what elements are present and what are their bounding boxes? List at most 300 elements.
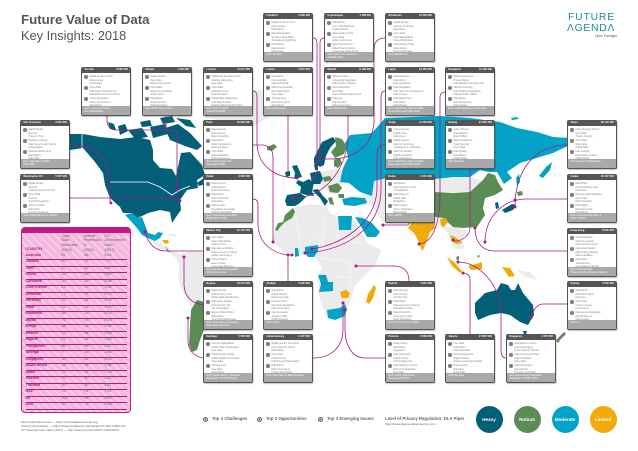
rows: 76 <box>62 376 66 380</box>
footer: a Welfare Role <box>327 56 343 59</box>
insights: Ease of Data <box>212 262 225 265</box>
rows: 81 <box>84 356 88 360</box>
footer: Smart Governance <box>206 271 226 274</box>
header: 2 415 000 <box>420 175 432 178</box>
insights: Data Ownership <box>394 353 411 356</box>
panel: Johannesburg <box>263 334 312 383</box>
header: Hong Kong <box>570 229 584 232</box>
insights: Data Standards <box>394 82 410 85</box>
insights: Data Privacy & Ethics <box>332 47 355 50</box>
connector: Stockholm <box>323 38 385 160</box>
insights: Open Data <box>454 146 465 149</box>
insights: Data Interoperability <box>150 90 172 93</box>
header: Bangalore <box>448 68 461 71</box>
insights <box>206 289 239 321</box>
insights: Data Literacy <box>332 101 347 104</box>
insights: Provision of AI Data <box>514 371 536 374</box>
insights: Transparency <box>212 364 226 367</box>
insights: Data Sharing Consent <box>394 364 417 367</box>
insights: Data Value <box>576 143 587 146</box>
connector: Madrid <box>292 116 348 199</box>
insights: Data Literacy <box>576 318 590 321</box>
panel: Sydney <box>567 281 616 330</box>
panel: Beijing <box>445 120 494 169</box>
rows: 81 <box>62 252 66 256</box>
insights: Ethical Value of <box>576 315 592 318</box>
footer: Next: Big Data <box>448 374 464 377</box>
footer: Data Ownership Trust <box>206 324 230 327</box>
insights: Open Data <box>28 193 40 196</box>
rows: 91 <box>84 389 88 393</box>
insights: Data Liability <box>394 211 407 214</box>
rows: Sweden <box>26 376 39 380</box>
footer <box>446 159 494 168</box>
rows: Singapore <box>26 356 43 360</box>
insights: Data Flow Regulation <box>272 304 294 307</box>
footer: Next: Society 5.0 Regulation <box>570 160 601 163</box>
rows: 73 <box>62 370 66 374</box>
header: Lagos <box>388 68 396 71</box>
insights: Data Ethics <box>272 289 284 292</box>
header: 5 207 000 <box>55 175 67 178</box>
header: 1 308 000 <box>359 14 371 17</box>
subtitle: Key Insights: 2018 <box>21 28 126 42</box>
insights: Identity Trust <box>394 296 407 299</box>
insights: Personal Data <box>272 79 287 82</box>
header: Abidjan <box>266 282 276 285</box>
legend: level of privacy regulation: Level of Privacy Regulation: DLA Piper <box>385 416 464 421</box>
rows: Senegal <box>26 350 39 354</box>
insights: Mass Data Market <box>212 240 231 243</box>
insights: Open Data <box>576 300 587 303</box>
insights: Data Literacy <box>272 47 286 50</box>
rows: Germany <box>26 298 41 302</box>
insights: Data Use <box>332 97 342 100</box>
header: 6 199 000 <box>359 68 371 71</box>
insights: Digital Identity & Trust <box>90 75 113 78</box>
header <box>264 335 312 340</box>
insights: Open Data <box>272 353 283 356</box>
legend: top 3 opportunities <box>257 416 306 422</box>
insights: Open Data <box>150 86 162 89</box>
insights: Digital Literacy for Access <box>272 342 299 345</box>
header <box>446 121 494 126</box>
insights: Data Rules <box>576 182 587 185</box>
insights: Data Sovereignty <box>212 189 230 192</box>
rows: Philippines <box>26 344 45 348</box>
legend: top 3 opportunities: Top 3 Opportunities <box>266 416 306 421</box>
insights: Digital Identity <box>28 182 44 185</box>
insights: Transparent Algorithms <box>272 39 296 42</box>
insights: Data Ownership <box>272 296 289 299</box>
insights: Data Sovereignty <box>514 364 533 367</box>
insights <box>206 236 238 268</box>
panel: San Francisco <box>20 120 70 169</box>
header: Frankfurt <box>266 14 278 17</box>
footer: Governance and Public Policy <box>388 163 420 166</box>
insights: Data Rights <box>28 154 41 157</box>
rows: South Africa <box>26 363 47 367</box>
insights: New Data <box>212 82 222 85</box>
header <box>204 229 252 234</box>
insights: Digital Finance <box>454 357 469 360</box>
connector: Frankfurt <box>312 38 317 179</box>
rows: 91 <box>84 259 88 263</box>
header <box>386 121 434 126</box>
insights: Data Flows Transparency <box>90 90 117 93</box>
rows: Spain <box>26 370 35 374</box>
header: Jakarta <box>448 335 457 338</box>
insights: Trust and Digital Divide <box>212 318 236 321</box>
header <box>568 282 616 287</box>
insights: New Data <box>332 90 343 93</box>
header <box>325 68 372 73</box>
footer: Next: Data Flow and Value of <box>570 214 601 217</box>
insights: Data Regulation <box>212 154 229 157</box>
panel: Lagos <box>385 67 434 116</box>
insights: Data Sharing <box>454 132 467 135</box>
rows: 82 <box>84 266 88 270</box>
insights <box>266 75 293 107</box>
insights: Decentralised Data Control <box>332 93 361 96</box>
insights: Data Interoperability <box>272 86 293 89</box>
rows: 26 <box>84 337 88 341</box>
insights: Data Identity Regulation <box>576 311 601 314</box>
rows: 5.36 <box>104 278 112 282</box>
insights: Data Ethics <box>150 97 163 100</box>
insights: Cyber Security Threats <box>514 349 539 352</box>
insights: Data Development <box>454 353 473 356</box>
footer <box>21 213 68 222</box>
insights: Data Value <box>150 79 162 82</box>
connector: London <box>253 91 298 179</box>
insights <box>448 128 473 160</box>
rows: 7.79 <box>104 370 112 374</box>
insights: Ethics and Access <box>454 75 473 78</box>
footer: Next: Consumer Privacy <box>84 107 110 110</box>
insights: Data Ethics <box>272 28 284 31</box>
rows: 52 <box>62 278 66 282</box>
insights: Machine Learning <box>28 139 48 142</box>
rows: 8.71 <box>104 292 112 296</box>
rows: 100 <box>62 396 68 400</box>
insights: Analytics Skills <box>272 315 287 318</box>
source notes <box>21 420 126 432</box>
header: 11 440 000 <box>479 68 492 71</box>
footer: Next: Identity Rights and <box>388 374 414 377</box>
table header band <box>22 228 130 233</box>
connector: Washington <box>70 198 181 202</box>
rows: Nigeria <box>26 337 38 341</box>
header: Washington DC <box>23 175 43 178</box>
connector: Singapore <box>457 261 506 358</box>
insights: Data Ethics <box>212 193 224 196</box>
legend: level of privacy regulation: https://www.dlapiperdataprotection.com <box>385 422 435 426</box>
insights: Data Ethics <box>272 43 284 46</box>
insights: Data Security and Control <box>28 143 56 146</box>
connector: Lisbon <box>287 116 289 172</box>
panel: Copenhagen <box>324 13 374 62</box>
insights <box>206 182 236 214</box>
footer <box>507 373 554 382</box>
header: Lisbon <box>266 68 275 71</box>
footer: NGO / Sectors <box>570 217 586 220</box>
insights: Data Literacy <box>394 293 408 296</box>
header: Abuja <box>388 121 396 124</box>
rows: 26 <box>62 382 66 386</box>
footer: Next: Data Driven Value Creation <box>388 160 424 163</box>
header: Stockholm <box>388 14 402 17</box>
column heading: Internet Penetration: Internet <box>84 234 95 238</box>
insights: Data Ethics <box>272 349 284 352</box>
insights <box>388 75 424 107</box>
insights: Data Ownership <box>332 86 350 89</box>
header <box>507 335 554 340</box>
insights: Data Literacy & Ethics <box>332 82 356 85</box>
map: moderate regulation countries (blue) <box>125 116 570 320</box>
insights <box>23 182 55 214</box>
footer: Next: Data Value / Public <box>23 160 50 163</box>
insights: Digital Asset <box>394 132 407 135</box>
rows: 34 <box>62 363 66 367</box>
insights: Digital Access <box>394 357 408 360</box>
connector: Mexico City <box>144 231 203 251</box>
insights: Digital Identity <box>150 75 166 78</box>
connector: Sydney <box>530 304 567 319</box>
panel: Pretoria <box>385 334 434 383</box>
insights: Mobile Data Infrastructure <box>212 296 239 299</box>
insights: AI Regulation <box>28 146 43 149</box>
header: Sydney <box>570 282 580 285</box>
insights: Data Profiles <box>454 135 467 138</box>
legend circle: heavy <box>476 406 502 432</box>
rows: Thailand <box>26 382 40 386</box>
connector: San Francisco <box>70 145 112 204</box>
panel: Dubai <box>385 174 434 223</box>
insights: Open Data <box>212 86 223 89</box>
insights: Data Governance <box>212 157 230 160</box>
header <box>568 121 616 126</box>
footer <box>386 52 434 61</box>
panel: Dakar <box>203 174 252 223</box>
connector: Dubai <box>382 222 410 226</box>
rows: 5.67 <box>104 382 112 386</box>
column heading: ICT Development Index: Index <box>104 243 113 247</box>
legend: top 3 challenges: Top 3 Challenges <box>212 416 247 421</box>
insights: Social Consumption Rights <box>454 360 482 363</box>
header: Santiago <box>206 335 217 338</box>
rows: 71 <box>62 292 66 296</box>
insights: Digital Skills <box>576 146 588 149</box>
insights: Data Innovation <box>514 357 531 360</box>
legend circle: robust: Robust <box>519 416 535 422</box>
insights: Business Ethics of AI <box>28 150 51 153</box>
connector: Bangalore <box>418 92 445 245</box>
connector: Paris to Senegal <box>253 145 274 243</box>
footer: Next: Data Access <box>266 107 286 110</box>
footer: Next: Financial Data <box>570 268 592 271</box>
connector: Toronto <box>107 116 178 191</box>
column heading: ICT Development Index <box>104 234 126 252</box>
header: Osaka <box>570 175 578 178</box>
insights: Cyber Threats <box>454 128 469 131</box>
footer <box>21 159 68 168</box>
insights: Open Data <box>332 36 344 39</box>
insights: Data Monetisation <box>272 32 291 35</box>
insights: Digital Divide <box>454 157 467 160</box>
header <box>264 282 312 287</box>
insights: Data Rules <box>212 200 223 203</box>
footer: Next: Governance Consensus <box>206 321 238 324</box>
panel: Madrid <box>324 67 374 116</box>
insights: Data Use Models <box>394 150 412 153</box>
insights: Data Protection <box>576 200 592 203</box>
insights: Data Literacy <box>454 104 468 107</box>
rows: 4.67 <box>104 344 112 348</box>
insights: Rural Data <box>454 371 465 374</box>
insights: Data Security Trends <box>576 243 598 246</box>
insights: Data Regulation <box>150 104 168 107</box>
insights: Open Data <box>394 32 405 35</box>
header <box>204 282 252 287</box>
rows: 8.05 <box>104 356 112 360</box>
insights: Data Rules <box>454 346 465 349</box>
rows: 55 <box>84 272 88 276</box>
insights: Tax Consultation <box>212 307 229 310</box>
footer <box>264 373 312 382</box>
connector: Abidjan <box>287 254 289 281</box>
insights: Data Integrity <box>576 150 590 153</box>
insights: Data Flow <box>454 368 464 371</box>
insights: Data Literacy <box>394 93 408 96</box>
insights: Mobile Digital Connectivity <box>212 357 240 360</box>
insights: Data Security & Trust <box>394 186 416 189</box>
insights: Public Rights Use <box>394 360 412 363</box>
rows: 76 <box>62 298 66 302</box>
header: 38 140 000 <box>601 121 614 124</box>
connector: Copenhagen <box>319 38 324 161</box>
header: 11 017 000 <box>237 68 250 71</box>
panel: Nairobi <box>385 281 434 330</box>
insights: Cyber Security Threat <box>272 346 295 349</box>
insights: Security Trust <box>212 243 226 246</box>
connector: Osaka and Taipei <box>484 199 567 243</box>
rows: 17 <box>62 285 66 289</box>
footer: Next: AI <box>570 321 579 324</box>
insights: Mobile Data Infrastructure <box>212 346 239 349</box>
rows: 27 <box>84 285 88 289</box>
insights: Data Silos <box>576 189 586 192</box>
insights: Free Data <box>454 342 464 345</box>
header <box>446 335 494 340</box>
insights: Data Governance <box>394 157 412 160</box>
insights <box>388 182 416 214</box>
insights: New Monopoly <box>212 93 227 96</box>
column heading: Internet Penetration <box>84 234 102 252</box>
insights: Data Ownership <box>394 311 411 314</box>
connector: Dakar panel to Ghana <box>253 199 293 256</box>
rows: 7.21 <box>104 389 112 393</box>
source notes: ICT Development Index (2017) — http://www.itu.int/net4/ITU-D/idi/2017/ <box>21 428 119 432</box>
insights: Use of Big Machines <box>332 25 354 28</box>
panel: Tokyo <box>567 120 616 169</box>
insights <box>388 342 417 374</box>
insights: Data Rules <box>394 135 405 138</box>
rows: 4.33 <box>104 311 112 315</box>
header: Madrid <box>327 68 336 71</box>
column heading: Internet Penetration: % <box>84 243 87 247</box>
connector: Nairobi <box>355 265 409 281</box>
source notes: Open Data Barometer — https://opendatabarometer.org <box>21 420 98 424</box>
header: 11 463 000 <box>419 121 432 124</box>
insights: New Data <box>212 349 222 352</box>
header: Nairobi <box>388 282 397 285</box>
rows: 88 <box>84 252 88 256</box>
rows: 73 <box>62 330 66 334</box>
insights: Shared Definitions <box>394 39 413 42</box>
panel: Singapore <box>506 334 556 383</box>
footer <box>204 267 252 276</box>
header: 2 566 000 <box>420 335 432 338</box>
insights: Cyber Security & Trust <box>576 128 599 131</box>
header <box>143 68 190 73</box>
legend: top 3 challenges <box>203 416 248 422</box>
insights: Data Flow Regulation <box>394 368 416 371</box>
insights: Citizen Literacy <box>576 304 592 307</box>
header: 10 000 000 <box>419 14 432 17</box>
insights: Transparency in Authority <box>394 146 421 149</box>
header <box>386 14 434 19</box>
insights: Data for Good Use <box>394 143 413 146</box>
header: Pretoria <box>388 335 398 338</box>
insights: Secure Global Policy <box>212 311 234 314</box>
header <box>568 229 616 234</box>
footer <box>204 159 252 168</box>
insights: Data Ethics <box>272 75 284 78</box>
insights: Data Security Trip <box>212 304 230 307</box>
insights: Security for Identity <box>394 25 414 28</box>
rows: 21 <box>62 337 66 341</box>
title: Future Value of Data <box>21 12 150 27</box>
footer <box>204 106 252 115</box>
map: robust regulation countries (green) <box>189 137 566 352</box>
footer: Governance and Public Policy <box>388 110 420 113</box>
panel: Toronto <box>81 67 130 116</box>
insights: Data Value Capture <box>212 300 232 303</box>
insights: Ethics for Data <box>332 75 348 78</box>
footer <box>264 106 312 115</box>
panel: Mexico City <box>203 228 252 277</box>
insights: Ethics and Consent <box>150 82 171 85</box>
rows: 84 <box>84 298 88 302</box>
insights: Data Literacy <box>212 186 226 189</box>
insights: Data Rules <box>28 208 40 211</box>
insights: Data Innovation & <box>454 139 473 142</box>
insights: Data Ethics <box>576 289 588 292</box>
header <box>446 68 494 73</box>
header <box>386 282 434 287</box>
column heading: Open Data Barometer: Data <box>62 238 69 242</box>
header: San Francisco <box>23 121 41 124</box>
insights: Public Sector Data Insight <box>272 360 299 363</box>
insights: Open Data <box>576 197 587 200</box>
insights: Mobile Sovereignty <box>212 254 232 257</box>
insights: Education and Skills <box>212 247 233 250</box>
legend circle: limited <box>590 406 616 432</box>
header: 3 337 000 <box>55 121 67 124</box>
footer: Next: ICT / Consumer Rights <box>388 321 419 324</box>
connector: Bogota <box>183 256 203 305</box>
